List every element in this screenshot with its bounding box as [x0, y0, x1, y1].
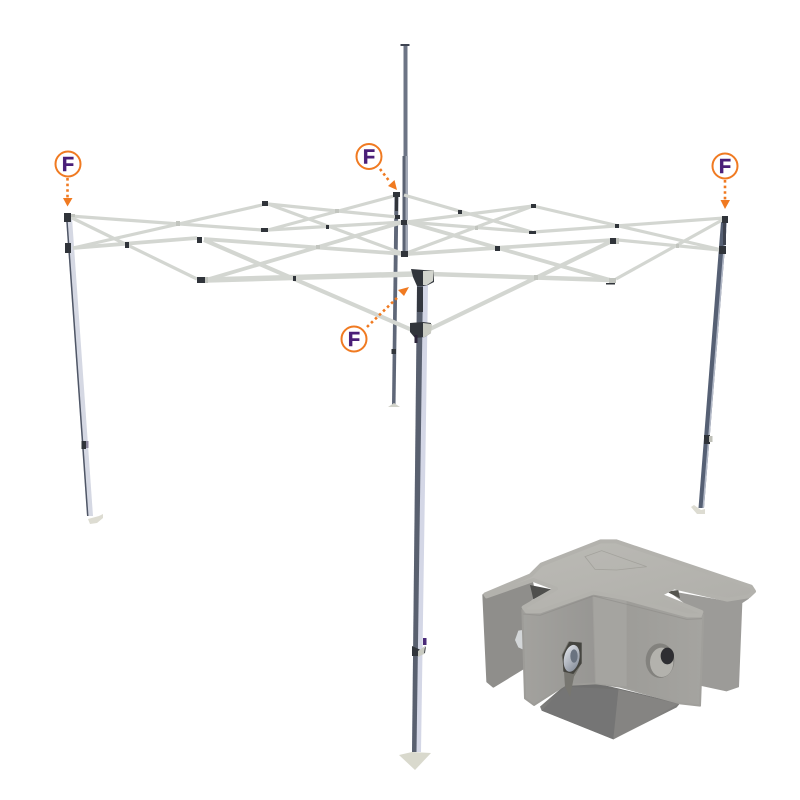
callout: F front: [342, 287, 409, 352]
front leg: [399, 269, 434, 770]
bracket: front left face: [522, 593, 596, 705]
bracket: back left nut edge: [515, 630, 523, 649]
bracket: logo emboss: [585, 551, 647, 570]
bracket: lip shadow: [523, 596, 702, 619]
callout: F top center: [356, 144, 397, 190]
right leg: [691, 222, 727, 514]
callout: F top right: [712, 154, 738, 209]
frame joints: [64, 192, 728, 284]
bracket: underside: [540, 683, 680, 739]
bracket: back right panel: [670, 592, 748, 691]
bracket: top plate: [485, 541, 754, 615]
back leg: [388, 196, 400, 407]
bracket: steel nut: [561, 642, 582, 697]
bracket: center corner highlight: [593, 597, 627, 687]
callout: F top right: F: [719, 156, 731, 178]
front leg head: [411, 269, 434, 286]
bracket: front right face: [593, 593, 703, 706]
truss frame bars: [68, 195, 724, 330]
callout: F top left: [56, 152, 80, 206]
bracket: screw hole: [646, 643, 674, 678]
callout: F top center: F: [363, 146, 375, 168]
bracket: back right slot shadow: [667, 590, 680, 598]
center pole: [400, 44, 410, 254]
callout: F front: F: [348, 329, 360, 351]
bracket: back left panel: [483, 580, 535, 687]
corner bracket photo: [483, 541, 754, 739]
left leg: [66, 218, 103, 524]
callout: F top left: F: [62, 154, 74, 176]
bracket: back left slot shadow: [530, 585, 552, 599]
lower slider: [412, 638, 426, 657]
front leg slider: [410, 322, 432, 343]
